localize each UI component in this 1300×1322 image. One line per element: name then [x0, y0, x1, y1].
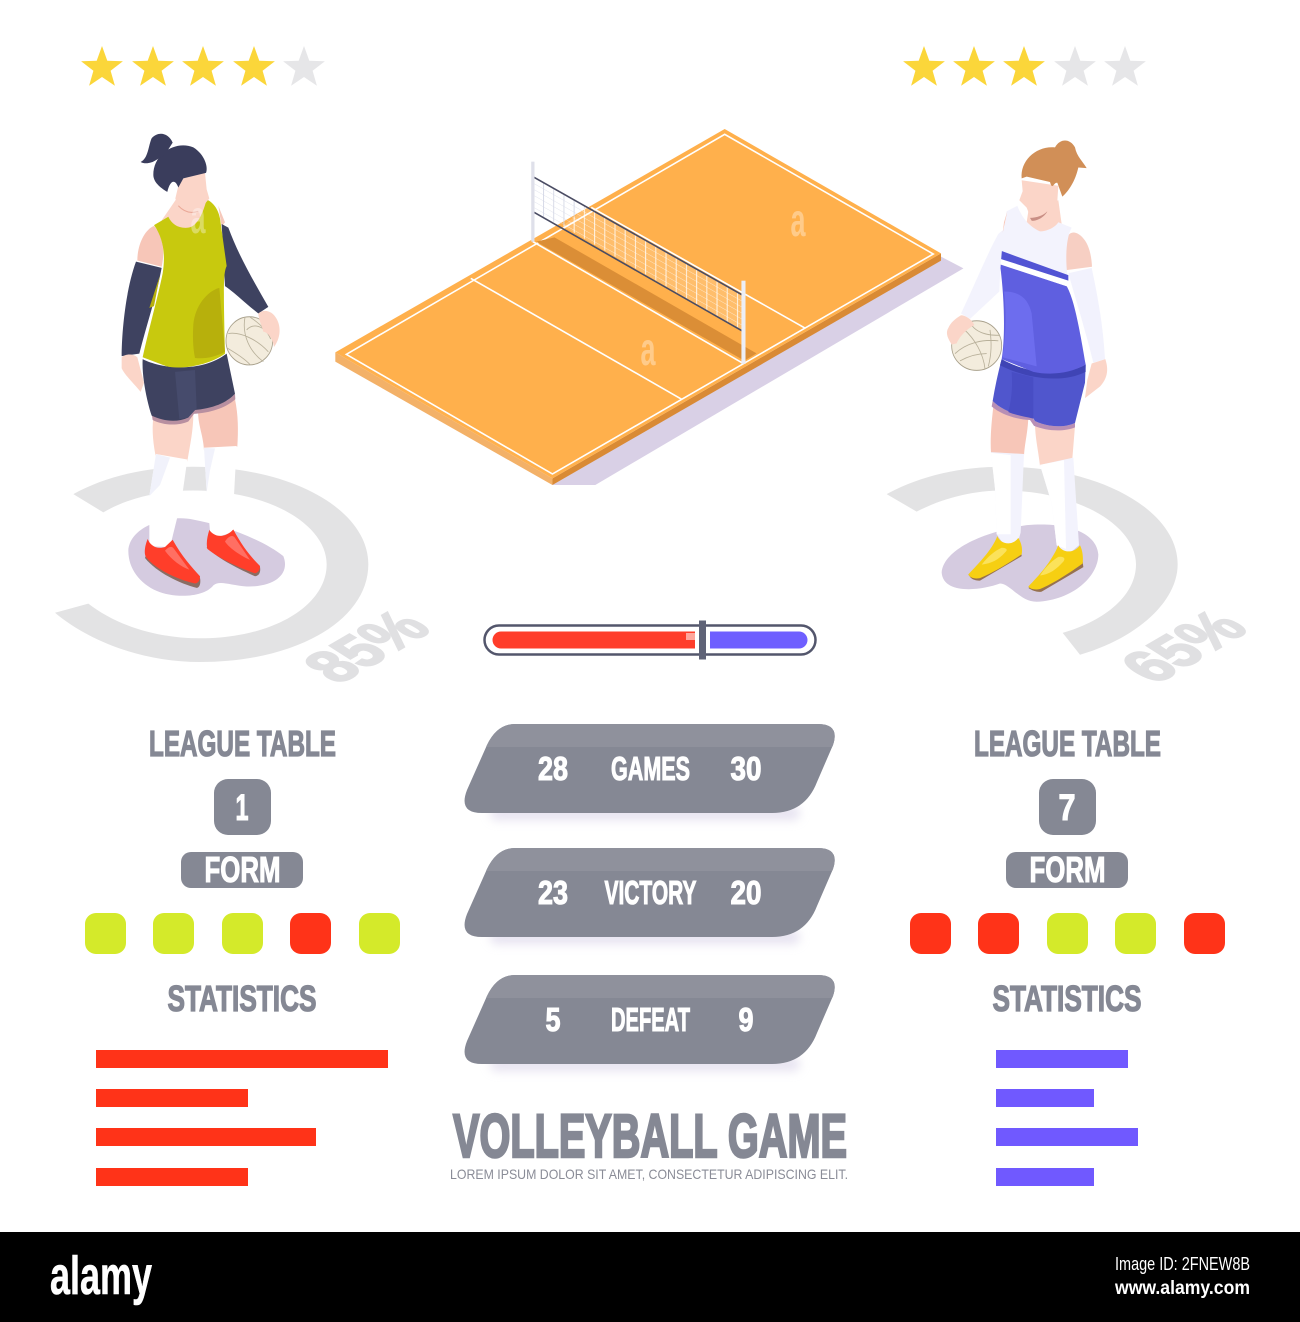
- right form squares: [910, 913, 1225, 954]
- footer logo: alamy: [50, 1246, 152, 1306]
- right league rank badge: 7: [1058, 787, 1076, 828]
- stat card: defeat: [465, 975, 835, 1071]
- balance bar: [484, 620, 816, 660]
- stat card: games: 28: [538, 750, 568, 787]
- faint watermark letters: [190, 191, 806, 1023]
- stat card: games: [465, 724, 835, 820]
- right player neck: [1027, 200, 1062, 234]
- left player: [122, 134, 285, 596]
- left statistics bars: [96, 1050, 388, 1186]
- stat card: defeat: 5: [546, 1001, 560, 1038]
- left panel: league, form, statistics: [85, 723, 400, 1186]
- faint watermark letters: a: [640, 323, 656, 375]
- stat card: defeat: DEFEAT: [611, 1001, 690, 1038]
- right star rating: [903, 46, 1146, 86]
- faint watermark letters: a: [790, 971, 806, 1023]
- right player far arm and ball: [947, 211, 1007, 370]
- stat card: games: 30: [730, 750, 762, 787]
- left star rating: [81, 46, 325, 86]
- stat card: victory: [465, 848, 835, 944]
- faint watermark letters: a: [490, 971, 506, 1023]
- left player head: [141, 134, 209, 212]
- right statistics bars: [996, 1050, 1138, 1186]
- left progress ring 85%: [55, 467, 445, 692]
- right league rank badge: [1039, 779, 1096, 835]
- left league rank badge: [214, 779, 271, 835]
- right form pill: FORM: [1030, 849, 1106, 890]
- footer bar: [0, 1232, 1300, 1322]
- faint watermark letters: a: [640, 838, 656, 890]
- stat card: victory: 23: [538, 874, 568, 911]
- right player head: [1019, 141, 1087, 221]
- footer image id: Image ID: 2FNEW8B: [1115, 1254, 1250, 1274]
- title: VOLLEYBALL GAME: [453, 1102, 847, 1170]
- left league table heading: LEAGUE TABLE: [149, 723, 336, 764]
- left percentage label: 85%: [288, 601, 445, 692]
- right percentage label: 65%: [1105, 601, 1262, 692]
- right panel: league, form, statistics: [910, 723, 1225, 1186]
- left player far arm and ball: [218, 206, 280, 365]
- right statistics heading: STATISTICS: [992, 978, 1142, 1019]
- volleyball court: [335, 129, 963, 485]
- faint watermark letters: a: [790, 194, 806, 246]
- stat card: victory: VICTORY: [604, 874, 696, 911]
- left league rank badge: 1: [236, 787, 248, 828]
- stat card: games: GAMES: [611, 750, 690, 787]
- stat card: defeat: 9: [738, 1001, 754, 1038]
- right progress ring 65%: [887, 467, 1262, 692]
- volleyball net: [531, 162, 746, 364]
- stat card: victory: 20: [730, 874, 762, 911]
- right player: [942, 141, 1107, 602]
- faint watermark letters: a: [190, 191, 206, 243]
- right player near arm: [1064, 233, 1107, 398]
- left statistics heading: STATISTICS: [168, 978, 316, 1019]
- right league table heading: LEAGUE TABLE: [974, 723, 1161, 764]
- left form squares: [85, 913, 400, 954]
- faint watermark letters: a: [490, 713, 506, 765]
- footer website: www.alamy.com: [1114, 1278, 1250, 1299]
- subtitle: LOREM IPSUM DOLOR SIT AMET, CONSECTETUR ADIPISCING ELIT.: [450, 1166, 848, 1182]
- left form pill: FORM: [204, 849, 280, 890]
- faint watermark letters: a: [790, 713, 806, 765]
- left player neck: [162, 193, 207, 234]
